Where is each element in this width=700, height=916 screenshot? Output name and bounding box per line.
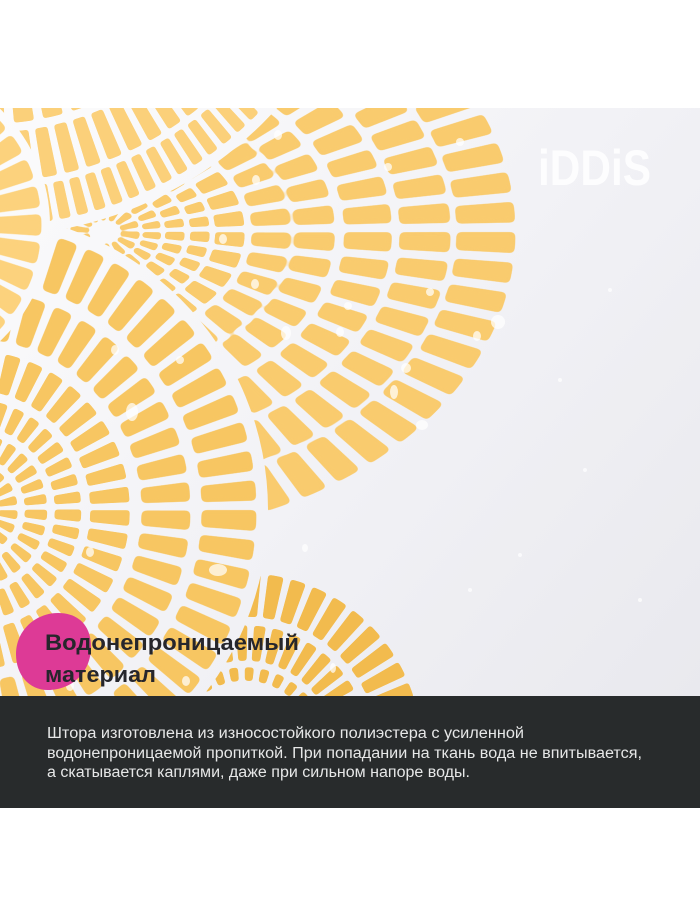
- dark description band: [0, 696, 700, 808]
- photo: yellow patterned curtain fabric: [0, 108, 700, 696]
- medallion: lower left: [0, 228, 268, 696]
- heading: Водонепроницаемый: [45, 630, 299, 655]
- medallion: far left edge: [0, 108, 50, 342]
- pink blob behind heading: [16, 613, 91, 690]
- medallion: upper left fan: [0, 108, 277, 228]
- description text: водонепроницаемой пропиткой. При попадании на ткань вода не впитывается,: [47, 745, 642, 762]
- water droplets: [66, 130, 642, 691]
- infographic canvas: [0, 108, 700, 808]
- medallion: large central right: [66, 108, 516, 510]
- description text: [47, 725, 642, 781]
- logo: IDDIS: iDDiS: [538, 140, 651, 196]
- description text: Штора изготовлена из износостойкого полиэстера с усиленной: [47, 725, 524, 742]
- medallion: bottom centre: [206, 575, 413, 696]
- heading: материал: [45, 662, 156, 687]
- heading: [45, 630, 299, 687]
- description text: а скатывается каплями, даже при сильном напоре воды.: [47, 764, 470, 781]
